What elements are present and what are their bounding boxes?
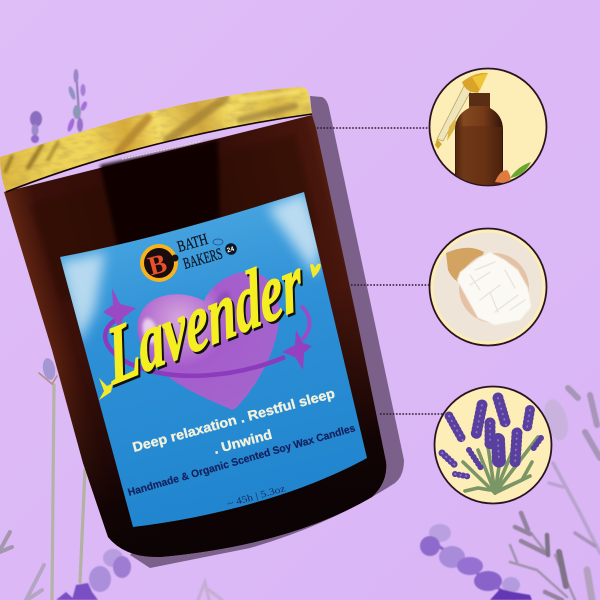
heart highlight — [140, 317, 160, 345]
right heart accent — [310, 264, 321, 278]
dotted leader lines — [317, 128, 443, 414]
dark shoulder of the wax — [30, 135, 318, 300]
product name shadow: Lavender — [103, 236, 310, 405]
ingredient circle: oil bottle — [430, 68, 546, 190]
lavender flower highlights — [442, 398, 530, 477]
heart — [137, 272, 280, 410]
lid wood grain — [5, 92, 298, 172]
heart shade — [211, 289, 233, 315]
left heart accent — [99, 378, 113, 400]
jar base fade — [4, 115, 386, 557]
decorative lavender blossoms, bottom — [56, 524, 532, 600]
lid — [0, 87, 312, 192]
decorative grey lavender branches, lower right — [198, 388, 600, 600]
candle shadow — [130, 96, 404, 568]
brand logo: B — [145, 248, 170, 281]
dropper cap — [462, 73, 488, 93]
right star — [282, 330, 312, 370]
jar glass — [4, 115, 386, 557]
brand name — [175, 231, 237, 273]
brand logo — [140, 244, 178, 282]
product name: Lavender — [101, 234, 308, 403]
ingredient circle: soy wax flakes — [430, 228, 546, 346]
tagline: Handmade & Organic Scented Soy Wax Candles — [127, 422, 357, 499]
heart illustration — [103, 272, 312, 410]
leader line 1 — [317, 127, 430, 129]
left star — [103, 288, 136, 330]
benefits text: Deep relaxation . Restful sleep — [131, 386, 336, 455]
wax flakes — [457, 252, 531, 325]
benefits text: . Unwind — [212, 427, 274, 457]
burn time and weight: ~ 45h | 5.3oz — [226, 484, 287, 510]
lid mottling — [0, 87, 312, 192]
brand name: BATH — [175, 231, 210, 256]
lid gap line — [6, 114, 312, 192]
bottle — [455, 106, 503, 185]
ingredient circle: lavender bouquet — [434, 386, 552, 504]
label light rays — [60, 192, 322, 345]
wooden spoon — [446, 248, 484, 285]
candle jar — [0, 87, 386, 557]
orbit ring — [105, 318, 285, 376]
leader line 3 — [380, 413, 443, 415]
decorative lavender sprigs, upper left — [30, 69, 88, 143]
dropper tube — [437, 86, 471, 141]
glint on glass rim — [122, 141, 202, 159]
brand name: 24 — [226, 246, 235, 254]
leader line 2 — [351, 284, 430, 286]
decorative lavender stems, lower left — [0, 357, 85, 600]
brand name: BAKERS — [181, 245, 225, 273]
product label — [60, 192, 367, 527]
lavender flower heads — [442, 398, 541, 477]
label paper — [60, 192, 367, 527]
lavender leaves — [463, 437, 538, 493]
dark core reflection — [100, 140, 220, 248]
almond and leaf — [495, 170, 511, 184]
